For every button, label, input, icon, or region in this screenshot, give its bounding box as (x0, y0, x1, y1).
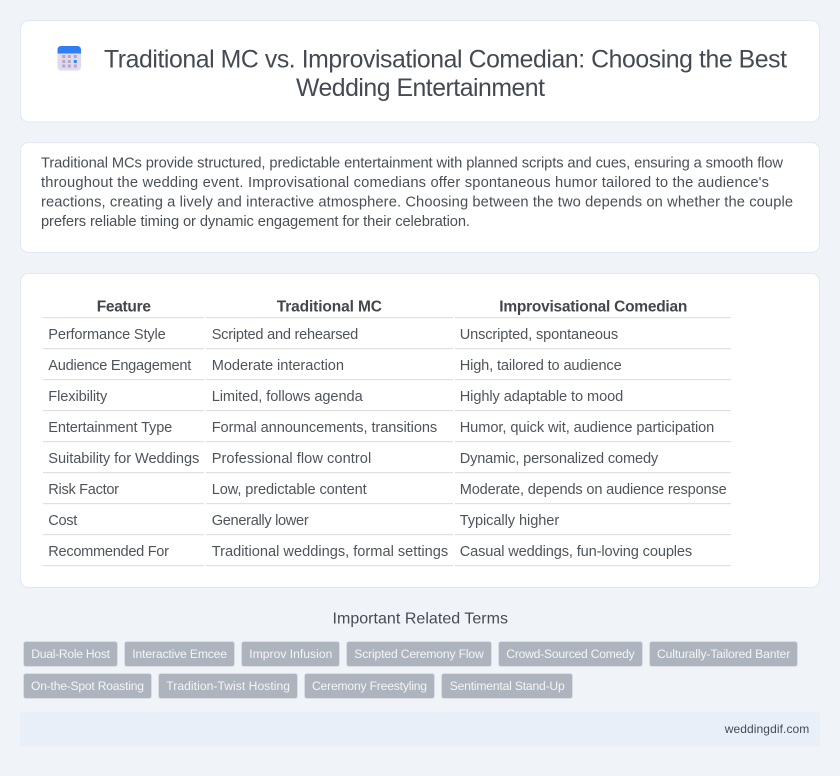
tag: sentimental stand-up: Sentimental Stand-Up (450, 679, 565, 693)
tag: on-the-spot roasting (24, 674, 152, 698)
tag: crowd-sourced comedy (498, 642, 642, 666)
row: performance style: Scripted and rehearsed (212, 327, 358, 343)
tag: interactive emcee: Interactive Emcee (132, 647, 227, 661)
title: Traditional MC vs. Improvisational Comedian: Choosing the Best (104, 47, 787, 74)
table header row: Feature (97, 299, 151, 316)
tag: interactive emcee (124, 642, 234, 666)
row: audience engagement: Audience Engagement (48, 358, 191, 374)
row: performance style: Performance Style (48, 327, 166, 343)
panel: title header (20, 20, 820, 122)
table header row (43, 299, 731, 318)
row: flexibility: Highly adaptable to mood (460, 389, 623, 405)
row: audience engagement (43, 358, 731, 380)
introduction text block: reactions, creating a lively and interactive atmosphere. Choosing between the two depends on whether the couple (41, 195, 793, 211)
tag: on-the-spot roasting: On-the-Spot Roasting (31, 679, 144, 693)
tag: ceremony freestyling: Ceremony Freestyling (312, 679, 427, 693)
tag: improv infusion: Improv Infusion (249, 647, 332, 661)
row: flexibility: Flexibility (48, 389, 108, 405)
tag: culturally-tailored banter: Culturally-Tailored Banter (657, 647, 790, 661)
tag: sentimental stand-up (442, 674, 572, 698)
tag: dual-role host: Dual-Role Host (31, 647, 111, 661)
row: risk factor: Risk Factor (48, 482, 119, 498)
introduction text block (41, 155, 793, 230)
row: recommended for: Casual weddings, fun-loving couples (460, 544, 692, 560)
footer bar (20, 712, 820, 746)
icon: calendar (58, 46, 81, 70)
table header row: Improvisational Comedian (499, 299, 687, 316)
row: risk factor (43, 482, 731, 504)
row: suitability for weddings: Professional flow control (212, 451, 371, 467)
panel: introduction (20, 142, 820, 252)
table header row: Traditional MC (277, 299, 382, 316)
row: entertainment type: Formal announcements, transitions (212, 420, 437, 436)
introduction text block: throughout the wedding event. Improvisational comedians offer spontaneous humor tailored to the audience's (41, 175, 769, 191)
heading: important related terms: Important Related Terms (332, 611, 508, 628)
introduction text block: prefers reliable timing or dynamic engagement for their celebration. (41, 214, 470, 230)
row: entertainment type: Humor, quick wit, audience participation (460, 420, 714, 436)
tag: crowd-sourced comedy: Crowd-Sourced Comedy (506, 647, 636, 661)
row: flexibility: Limited, follows agenda (212, 389, 364, 405)
related terms tags (24, 642, 798, 698)
tag: culturally-tailored banter (650, 642, 798, 666)
row: flexibility (43, 389, 731, 411)
row: cost: Cost (48, 513, 77, 529)
row: recommended for (43, 544, 731, 566)
row: cost: Generally lower (212, 513, 309, 529)
row: suitability for weddings: Dynamic, personalized comedy (460, 451, 659, 467)
tag: scripted ceremony flow (346, 642, 492, 666)
tag: dual-role host (24, 642, 118, 666)
row: recommended for: Recommended For (48, 544, 169, 560)
title: Wedding Entertainment (296, 75, 545, 102)
row: suitability for weddings: Suitability for Weddings (48, 451, 199, 467)
panel: comparison table (20, 274, 820, 588)
row: entertainment type (43, 420, 731, 442)
row: cost: Typically higher (460, 513, 559, 529)
row: performance style (43, 327, 731, 349)
tag: tradition-twist hosting (158, 674, 298, 698)
row: audience engagement: High, tailored to audience (460, 358, 622, 374)
tag: tradition-twist hosting: Tradition-Twist Hosting (166, 679, 290, 693)
row: risk factor: Moderate, depends on audience response (460, 482, 727, 498)
row: audience engagement: Moderate interaction (212, 358, 344, 374)
tag: ceremony freestyling (304, 674, 434, 698)
footer source text: weddingdif.com (724, 722, 809, 736)
row: suitability for weddings (43, 451, 731, 473)
row: risk factor: Low, predictable content (212, 482, 367, 498)
tag: improv infusion (242, 642, 340, 666)
introduction text block: Traditional MCs provide structured, predictable entertainment with planned scripts and cues, ensuring a smooth flow (41, 155, 783, 171)
row: recommended for: Traditional weddings, formal settings (212, 544, 448, 560)
row: cost (43, 513, 731, 535)
row: performance style: Unscripted, spontaneous (460, 327, 618, 343)
title (104, 47, 787, 102)
tag: scripted ceremony flow: Scripted Ceremony Flow (354, 647, 484, 661)
row: entertainment type: Entertainment Type (48, 420, 172, 436)
